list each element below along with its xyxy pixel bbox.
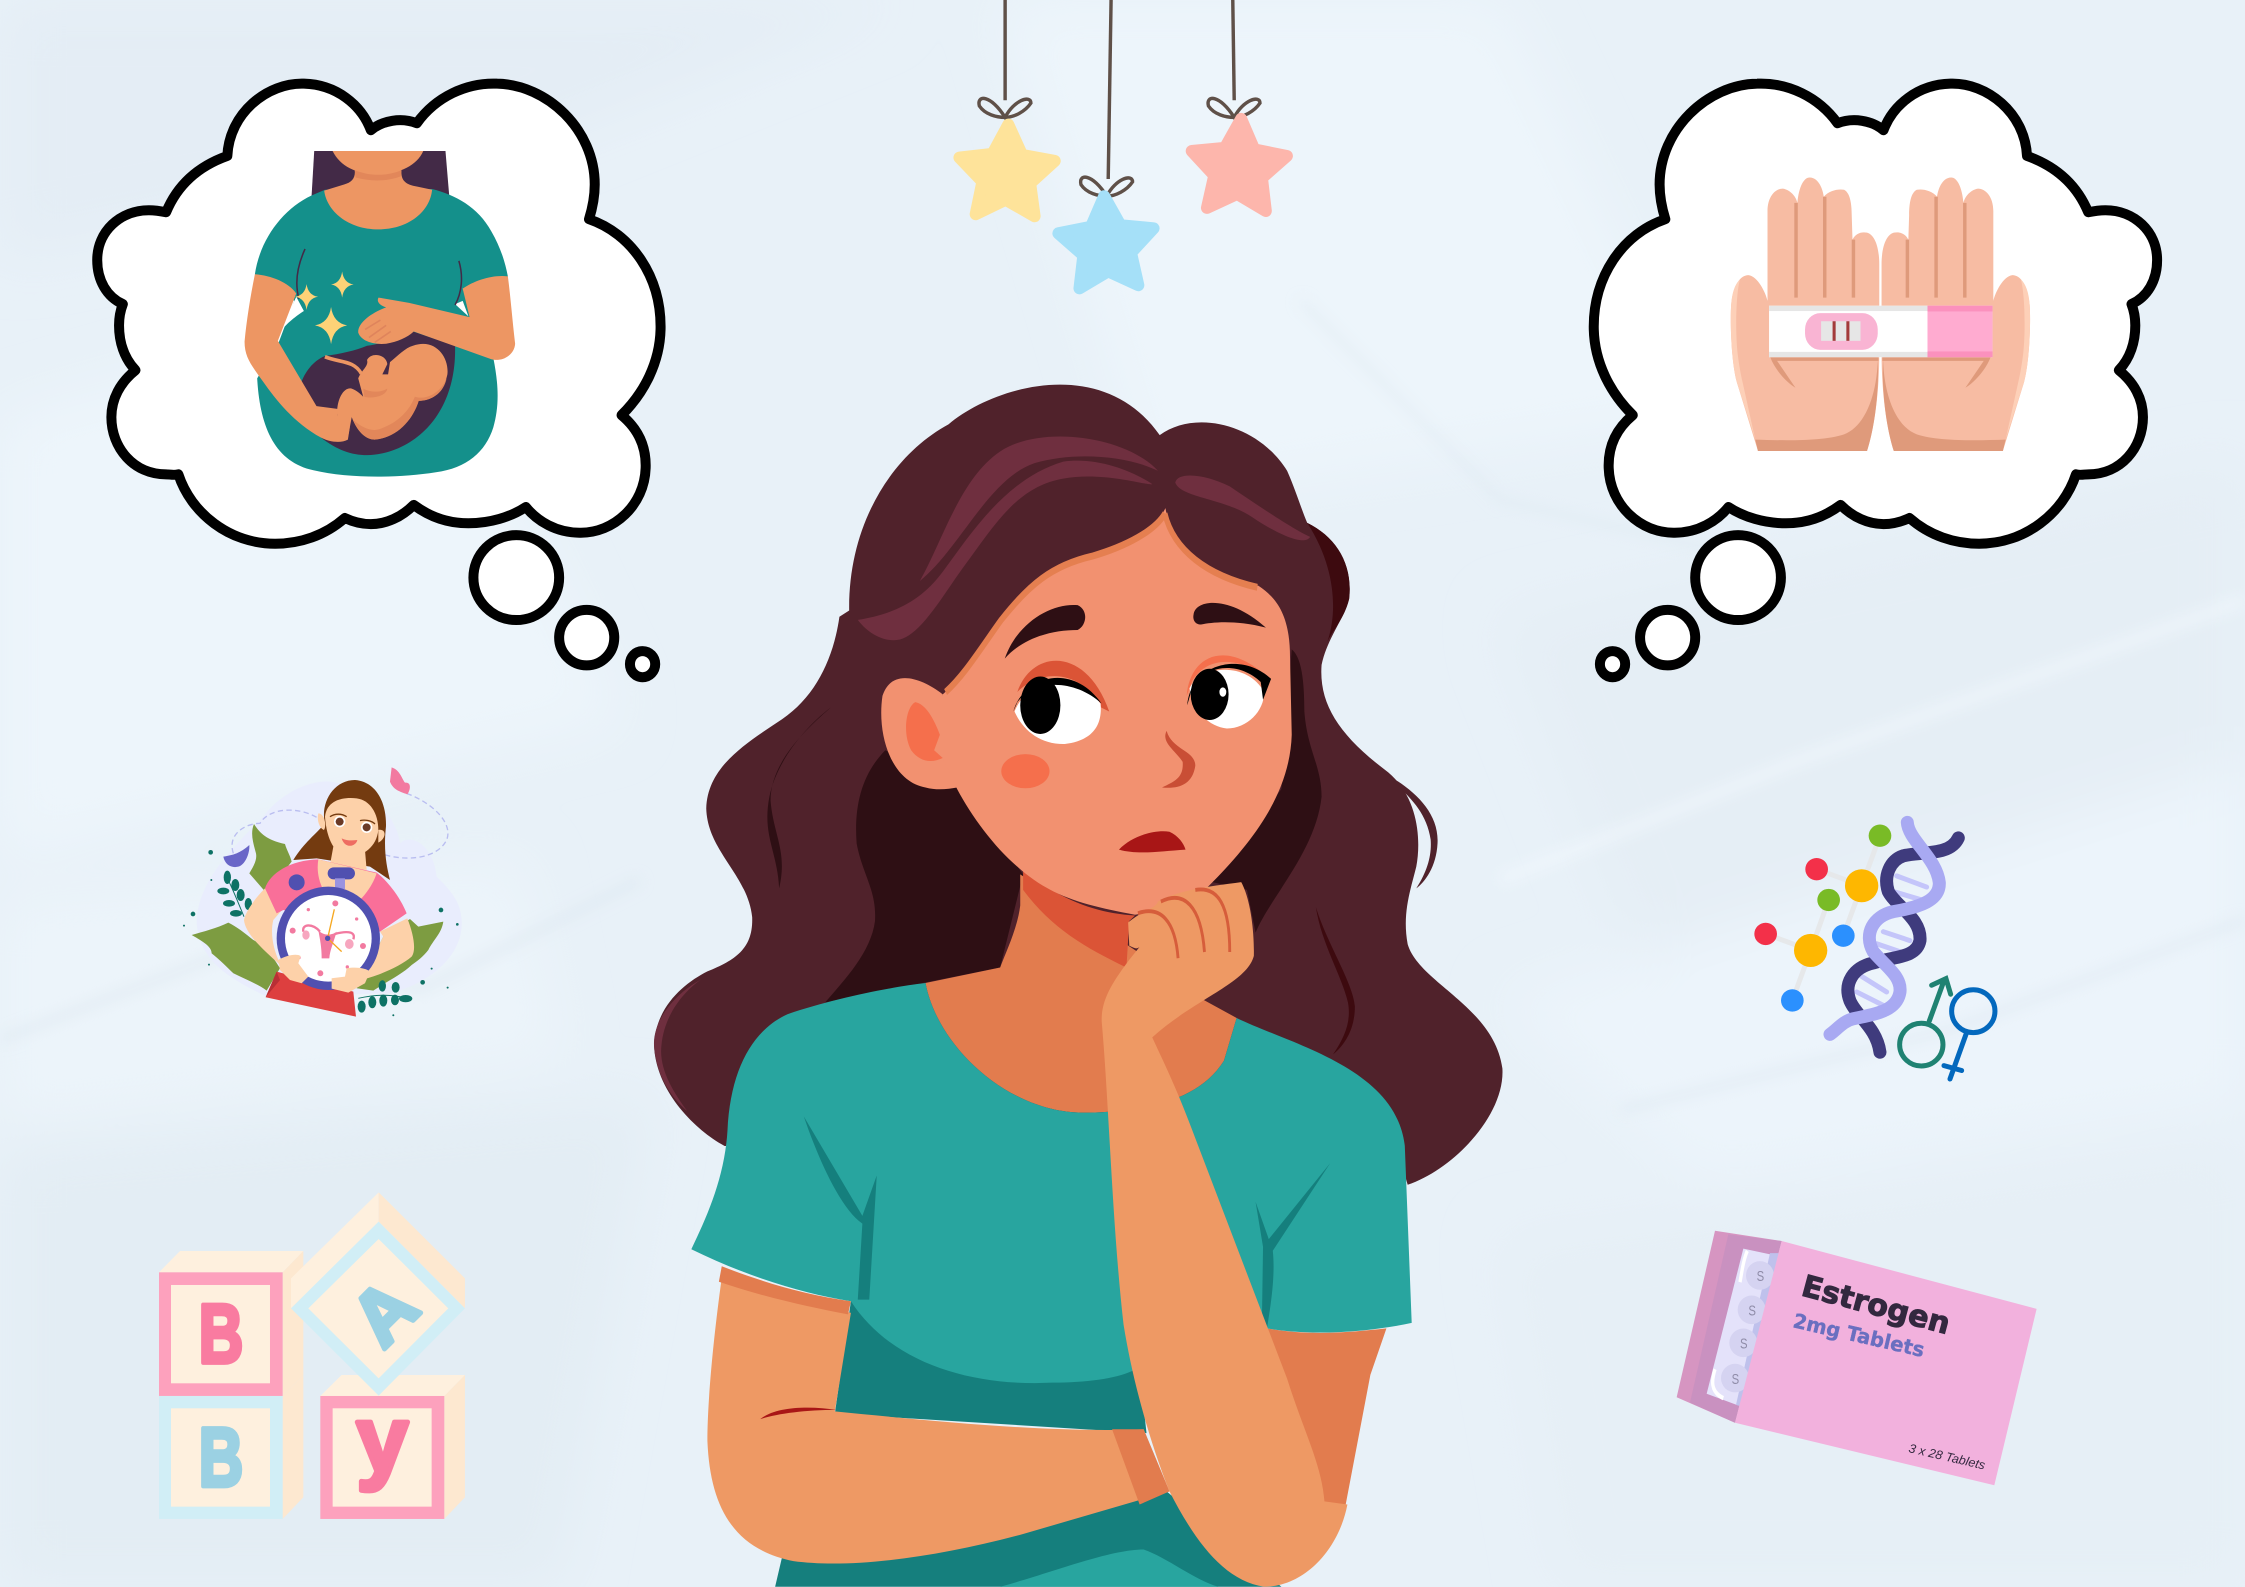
hands holding pregnancy test	[1731, 178, 2030, 451]
butterflies	[223, 767, 410, 867]
left hand	[1731, 178, 1879, 451]
woman hair	[293, 780, 390, 880]
ear inner	[906, 702, 943, 761]
neck	[926, 874, 1237, 1113]
molecule nodes	[1754, 825, 1891, 1012]
thought bubble right with pregnancy test	[1594, 84, 2157, 677]
woman shirt	[265, 859, 407, 932]
teal sprigs and dots	[183, 850, 459, 1016]
woman chest	[318, 859, 377, 900]
crossed arm	[707, 1266, 1169, 1564]
eyebrows	[1005, 603, 1266, 659]
block Y pink	[320, 1375, 465, 1519]
box flap shade	[1690, 1234, 1782, 1423]
DNA helix	[1830, 822, 1958, 1052]
lower shirt	[775, 1491, 1281, 1587]
bubble outline right	[1594, 84, 2157, 544]
bubble outline left	[97, 84, 661, 544]
blister pack: S	[1732, 1370, 1739, 1387]
neck shadow	[1023, 871, 1135, 968]
block B blue	[159, 1375, 303, 1519]
yellow star	[958, 123, 1056, 217]
test strip	[1769, 306, 1993, 357]
dashed flight path	[232, 793, 448, 858]
bubble tail circles left	[473, 535, 655, 677]
baby blocks	[159, 1192, 465, 1519]
blister pack: S	[1740, 1335, 1748, 1352]
star strings	[979, 0, 1260, 196]
male symbol	[1900, 979, 1951, 1066]
block B pink: B	[199, 1288, 243, 1381]
blue star	[1057, 194, 1156, 289]
clock woman illustration	[183, 767, 462, 1017]
right eye	[1187, 655, 1271, 729]
molecule links	[1766, 836, 1880, 1000]
thought bubble left with pregnant woman	[97, 84, 661, 677]
blister pack: S	[1757, 1268, 1764, 1285]
pregnant woman illustration	[245, 151, 515, 477]
far upper arm	[1224, 1328, 1386, 1505]
stopwatch	[266, 867, 380, 1017]
block B pink	[159, 1251, 303, 1396]
face	[881, 508, 1292, 915]
bubble tail circles right	[1600, 535, 1781, 677]
woman face	[325, 798, 378, 857]
box front	[1735, 1241, 2037, 1485]
hair	[654, 385, 1503, 1185]
raised arm and hand	[1102, 882, 1347, 1587]
pink star	[1189, 116, 1289, 212]
label: 3 x 28 Tablets: 3 x 28 Tablets	[1907, 1441, 1986, 1472]
label: Estrogen: Estrogen	[1798, 1269, 1954, 1342]
hanging stars	[958, 0, 1289, 289]
estrogen pill box	[1677, 1231, 2037, 1485]
left eye	[1013, 661, 1109, 744]
DNA and gender symbols	[1754, 822, 1995, 1079]
block A tilted	[291, 1192, 465, 1396]
shirt torso shadow	[835, 1301, 1147, 1433]
block A tilted: A	[335, 1263, 434, 1363]
hands on stopwatch	[278, 955, 370, 993]
blister pack	[1707, 1249, 1780, 1407]
shirt	[691, 983, 1412, 1383]
woman ears and neck	[318, 813, 385, 870]
lavender blob	[197, 782, 462, 997]
box flap	[1677, 1231, 1782, 1423]
thinking girl	[654, 385, 1503, 1587]
block B blue: B	[199, 1411, 243, 1504]
cheek	[1001, 754, 1050, 788]
block Y pink: y	[356, 1388, 408, 1492]
right hand	[1882, 178, 2030, 451]
nose	[1162, 731, 1195, 788]
mouth	[1119, 831, 1186, 852]
blister pack: S	[1748, 1302, 1756, 1319]
woman arms	[244, 888, 414, 980]
leaves	[192, 824, 443, 991]
female symbol	[1944, 990, 1995, 1079]
label: 2mg Tablets: 2mg Tablets	[1791, 1308, 1927, 1362]
